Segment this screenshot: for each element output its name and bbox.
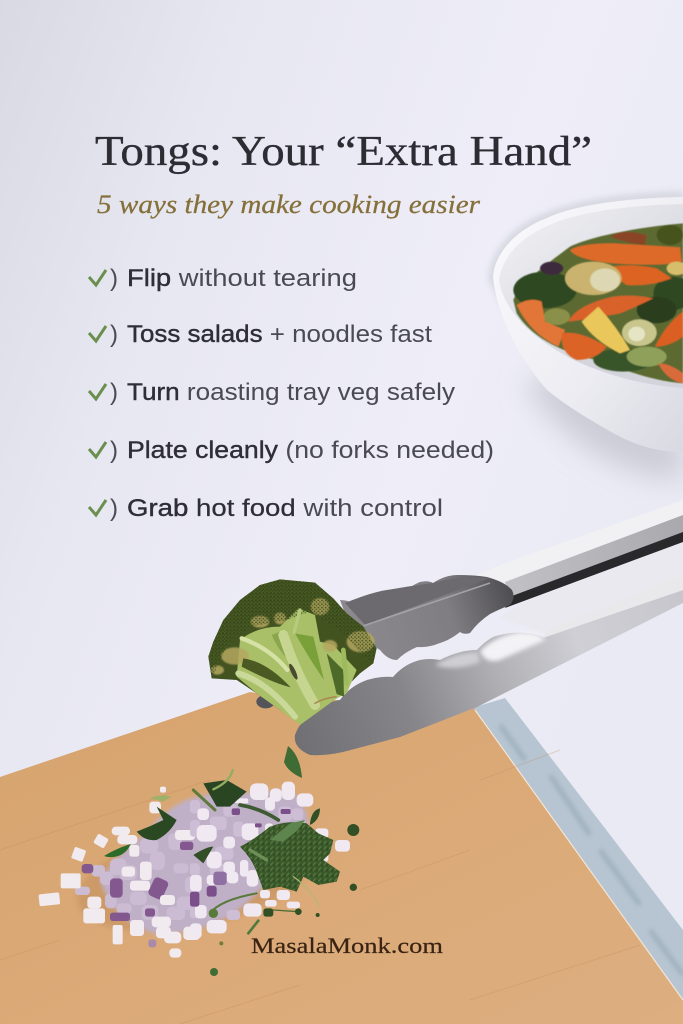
tongs (295, 500, 683, 755)
towel folds (500, 725, 683, 975)
small herb sprigs (193, 808, 359, 945)
upper head top shade (345, 577, 490, 625)
broccoli floret (208, 579, 377, 725)
bowl body (493, 197, 683, 453)
second scallop highlight (435, 652, 480, 668)
item 1: Flip without tearing (127, 265, 357, 292)
item 4: ) (110, 437, 118, 464)
cutting board (0, 692, 683, 1024)
board light edge (475, 710, 683, 1000)
pile shadow (68, 806, 322, 950)
crown yellow patches (211, 598, 375, 675)
upper head crease (363, 583, 490, 626)
wood grain (0, 750, 640, 1024)
lower arm top band (543, 575, 683, 638)
subheading: 5 ways they make cooking easier (97, 190, 481, 219)
onion pieces left (38, 787, 200, 958)
item 3: ) (110, 379, 118, 406)
item 1: ) (110, 265, 118, 292)
stem strands (238, 610, 347, 717)
falling herb leaf (284, 746, 302, 778)
bowl outline shade (488, 191, 683, 340)
herb top cluster (203, 780, 247, 807)
pale underside between arms (500, 542, 683, 632)
crown (208, 579, 377, 723)
tong tip behind stem (256, 695, 275, 708)
stray herb bit (210, 968, 218, 976)
item 5: ) (110, 495, 118, 522)
item 2: Toss salads + noodles fast (127, 321, 432, 348)
crown texture (208, 579, 377, 678)
upper scalloped head (340, 575, 514, 660)
onion and herb pile (38, 746, 359, 976)
stem cavities (242, 632, 344, 697)
item 2: ) (110, 321, 118, 348)
onion pieces right (190, 770, 359, 945)
stem dark spot (288, 663, 299, 680)
herb leaf highlight (270, 820, 305, 842)
towel under cutting board (472, 698, 683, 1000)
upper handle side face (505, 515, 683, 600)
lower arm (295, 590, 683, 755)
bowl of roasted vegetables (488, 191, 683, 480)
green herb left (104, 844, 131, 857)
scallop highlights (480, 632, 545, 661)
bowl inner wall (499, 204, 683, 388)
list of five uses (89, 265, 494, 522)
heading: Tongs: Your “Extra Hand” (95, 129, 592, 175)
herb cluster (240, 822, 340, 892)
food (513, 223, 683, 383)
item 5: Grab hot food with control (127, 495, 443, 522)
herb stems (193, 770, 320, 933)
website credit: MasalaMonk.com (251, 933, 443, 958)
onion base (100, 790, 308, 935)
item 4: Plate cleanly (no forks needed) (127, 437, 494, 464)
bowl shadow (525, 370, 683, 480)
upper handle top face (477, 500, 683, 582)
handle slot (505, 532, 683, 608)
item 3: Turn roasting tray veg safely (127, 379, 455, 406)
herb texture (240, 822, 340, 892)
stem base (237, 608, 357, 725)
